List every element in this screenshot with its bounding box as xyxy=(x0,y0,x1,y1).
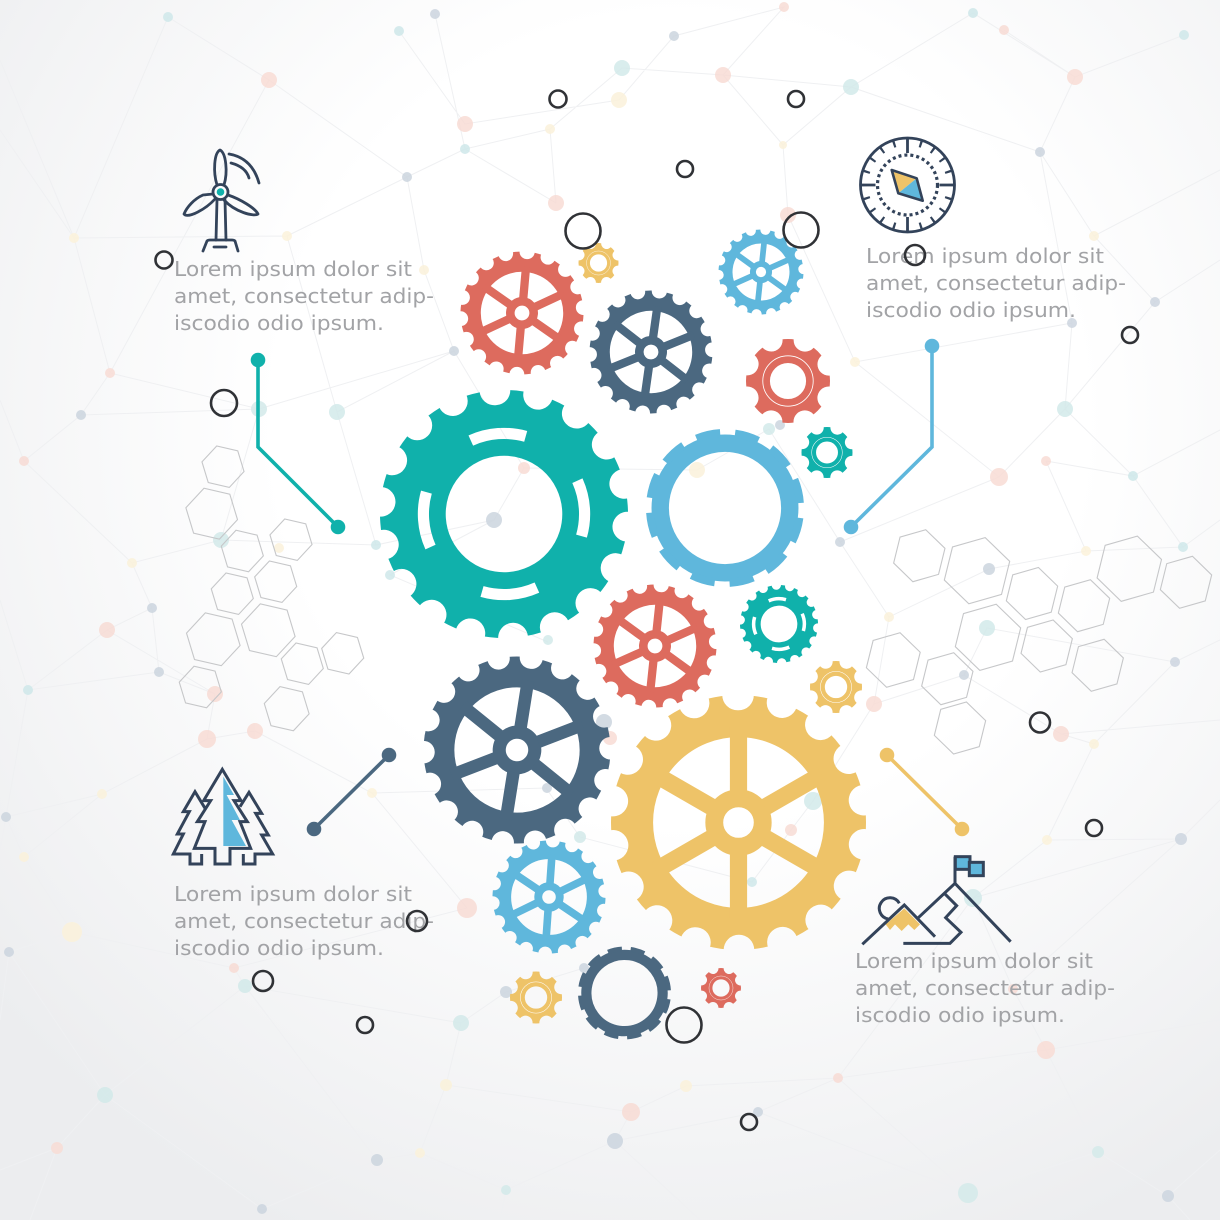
icon: compass xyxy=(860,138,954,232)
text block: top right: amet, consectetur adip- xyxy=(866,271,1126,295)
gear: small red bottom xyxy=(707,974,735,1002)
text block: bottom left: iscodio odio ipsum. xyxy=(174,936,384,960)
connector: dark xyxy=(307,748,396,836)
icon: wind turbine xyxy=(184,150,259,251)
right hexagon cluster xyxy=(860,526,1218,758)
gear: large teal xyxy=(407,417,601,611)
gear: dark upper xyxy=(593,294,709,410)
gear: blue upper xyxy=(722,233,800,311)
connector: yellow xyxy=(880,748,969,836)
gear: small yellow right xyxy=(817,668,855,706)
icon: mountains with flag xyxy=(862,857,1011,944)
left hexagon cluster xyxy=(175,444,368,733)
text block: bottom right: iscodio odio ipsum. xyxy=(855,1003,1065,1027)
text block: bottom right: Lorem ipsum dolor sit xyxy=(855,949,1093,973)
text block: bottom right: amet, consectetur adip- xyxy=(855,976,1115,1000)
text block: bottom left: amet, consectetur adip- xyxy=(174,909,434,933)
gear: blue lower xyxy=(499,847,599,947)
connector: blue xyxy=(844,339,939,534)
gear: small teal cog xyxy=(809,434,845,471)
gear: small yellow top xyxy=(584,249,613,277)
connector: teal xyxy=(251,353,345,534)
text block: top right: iscodio odio ipsum. xyxy=(866,298,1076,322)
text block: top left: Lorem ipsum dolor sit xyxy=(174,257,412,281)
text block: top left: iscodio odio ipsum. xyxy=(174,311,384,335)
gear: red upper xyxy=(466,257,578,369)
text block: top left xyxy=(174,257,434,335)
text block: top right: Lorem ipsum dolor sit xyxy=(866,244,1104,268)
gear: yellow large xyxy=(632,716,845,929)
text block: bottom right xyxy=(855,949,1115,1027)
gear: red cog xyxy=(758,351,818,411)
gear: small teal slotted xyxy=(748,593,810,655)
icon: pine trees xyxy=(173,769,273,864)
gears cluster xyxy=(407,233,855,1043)
text block: bottom left: Lorem ipsum dolor sit xyxy=(174,882,412,906)
text block: top left: amet, consectetur adip- xyxy=(174,284,434,308)
gear: dark ring xyxy=(575,943,674,1043)
gear: light blue ring xyxy=(640,423,810,593)
gear: dark large xyxy=(428,661,606,839)
outlined dark circles xyxy=(156,90,1138,1130)
gear: small yellow bottom xyxy=(517,979,555,1016)
text block: top right xyxy=(866,244,1126,322)
gear: red middle xyxy=(599,590,711,702)
text block: bottom left xyxy=(174,882,434,960)
